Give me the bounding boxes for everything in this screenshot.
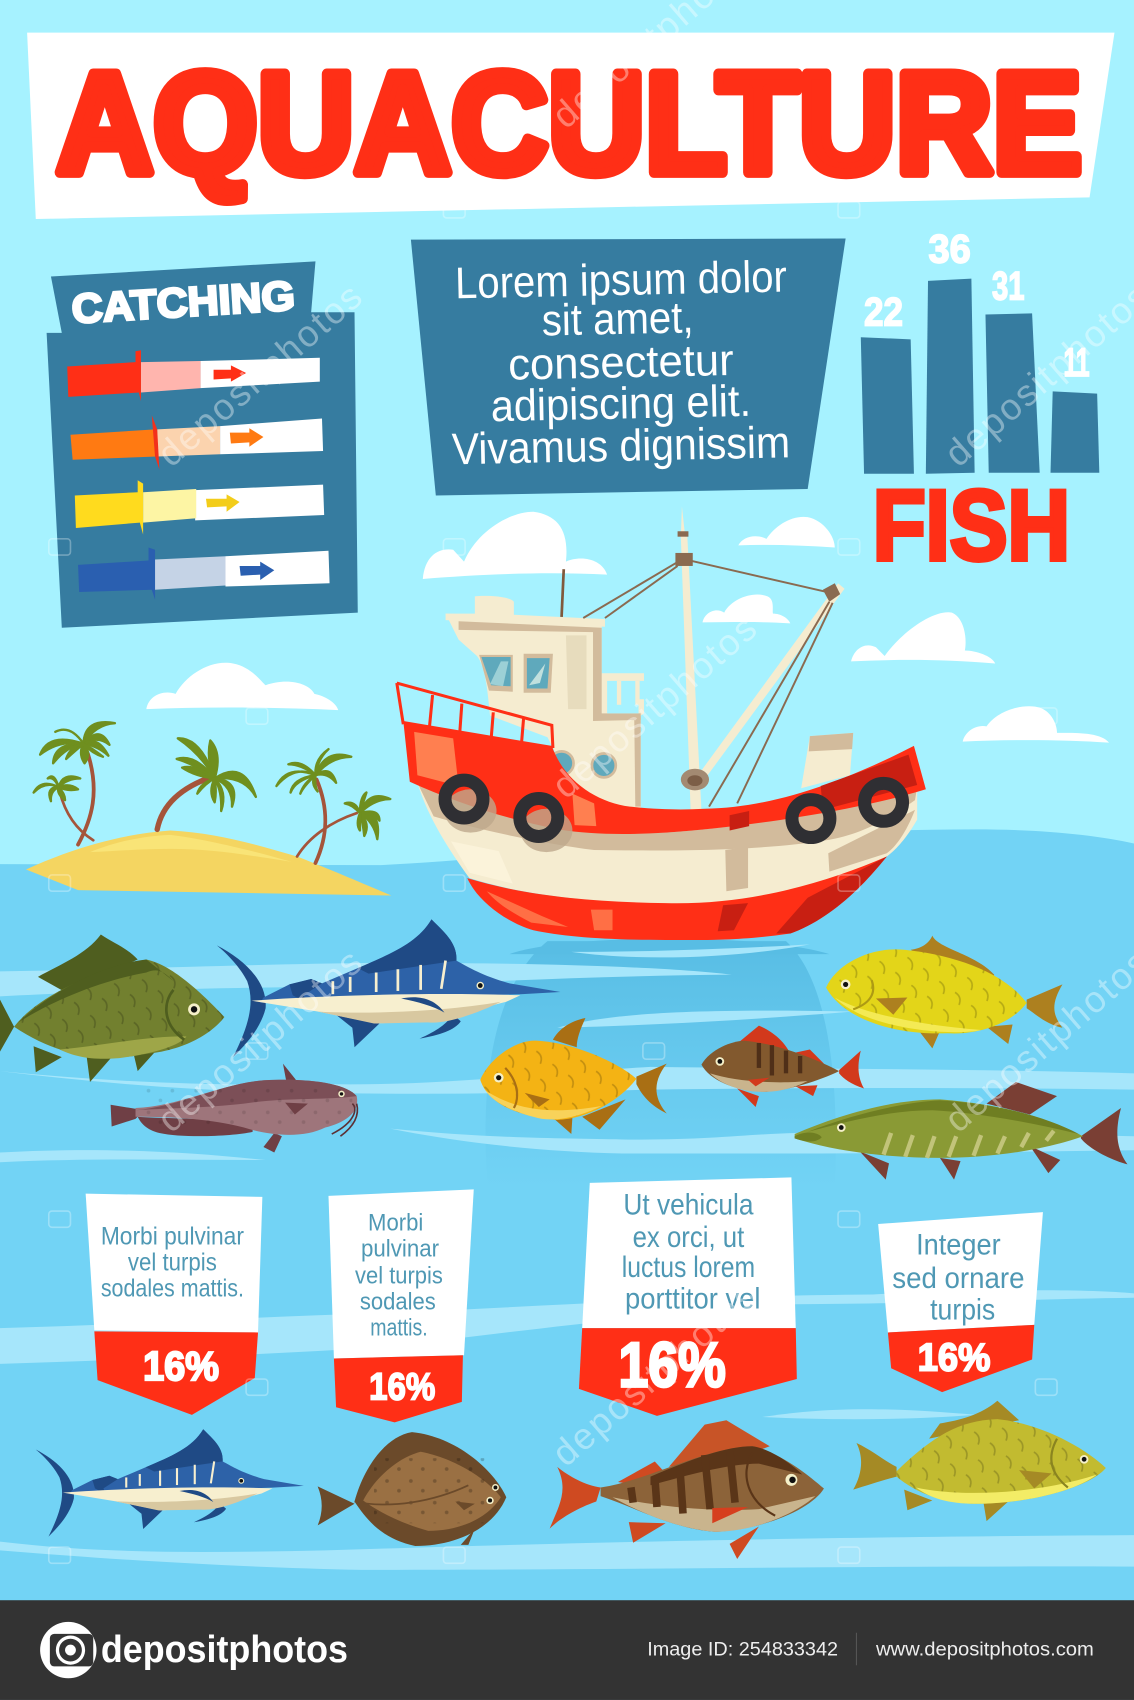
watermarks: depositphotos	[150, 276, 370, 474]
bar: orange	[70, 415, 323, 469]
red bulwark	[403, 721, 926, 834]
card text: sodales	[360, 1289, 436, 1316]
lower red hull	[467, 857, 887, 940]
percent value: 16%	[143, 1343, 219, 1389]
card text: Ut vehicula	[623, 1189, 754, 1221]
fish: olive carp	[853, 1401, 1106, 1521]
percent value: 16%	[918, 1336, 990, 1379]
palm trunks	[60, 754, 357, 863]
bar: blue	[78, 548, 330, 600]
windows	[479, 655, 513, 692]
bar chart: fish	[861, 227, 1099, 581]
chart values: 11	[1064, 341, 1090, 385]
card text	[892, 1229, 1025, 1326]
card text: pulvinar	[361, 1236, 439, 1263]
cabin	[446, 596, 644, 811]
small camera watermarks	[49, 36, 1057, 1563]
fish: blue marlin	[217, 919, 560, 1057]
island with palm trees	[26, 722, 391, 896]
cream hull	[417, 783, 917, 904]
antenna	[562, 569, 564, 617]
card text: Morbi pulvinar	[101, 1223, 244, 1251]
chart values	[864, 227, 1090, 385]
fish: large perch	[550, 1420, 824, 1559]
text block: consectetur	[508, 336, 734, 390]
card text	[101, 1223, 244, 1303]
fish: small perch	[701, 1026, 864, 1107]
card text: Morbi	[368, 1210, 423, 1237]
panel: lorem ipsum description	[411, 239, 846, 495]
fish: green carp	[0, 935, 224, 1082]
chart values: 22	[864, 290, 903, 334]
panel: catching	[47, 261, 358, 628]
tire shadows	[444, 789, 572, 852]
tires	[445, 780, 903, 838]
card text: sed ornare	[892, 1263, 1025, 1295]
title text: AQUACULTURE	[56, 43, 1082, 203]
clouds	[146, 512, 1109, 743]
mast and rigging	[583, 506, 845, 810]
watermarks	[150, 0, 1134, 1474]
text block: Lorem ipsum dolor	[455, 252, 787, 308]
card text	[622, 1189, 761, 1316]
card: percent three	[579, 1177, 797, 1416]
heading: fish: FISH	[873, 470, 1070, 581]
fish: catfish	[111, 1064, 357, 1152]
image id: Image ID: 254833342	[647, 1639, 838, 1661]
card: percent one	[86, 1194, 262, 1415]
fish: flounder	[318, 1432, 506, 1546]
card text: turpis	[930, 1294, 995, 1326]
icon: camera logo	[40, 1622, 96, 1678]
card text: Integer	[916, 1229, 1001, 1261]
fish: golden carp	[480, 1018, 667, 1134]
fish: pike	[795, 1082, 1127, 1180]
card text: vel turpis	[128, 1249, 217, 1277]
card: percent four	[878, 1212, 1043, 1392]
palm leaves	[34, 722, 390, 839]
website: www.depositphotos.com	[875, 1639, 1094, 1661]
text block: Vivamus dignissim	[451, 418, 791, 474]
percent value: 16%	[618, 1331, 726, 1401]
text block: adipiscing elit.	[490, 377, 751, 431]
watermarks: depositphotos	[150, 941, 370, 1140]
card: percent two	[328, 1189, 474, 1422]
portholes	[550, 751, 574, 775]
card text: vel turpis	[355, 1263, 443, 1290]
percent value: 16%	[369, 1367, 435, 1409]
fishing boat	[397, 506, 926, 940]
footer bar	[0, 1600, 1134, 1700]
card text	[355, 1210, 443, 1342]
heading: catching: CATCHING	[70, 273, 296, 332]
bar: red	[67, 350, 320, 401]
card text: ex orci, ut	[633, 1222, 744, 1254]
card text: mattis.	[370, 1315, 428, 1342]
text block: sit amet,	[541, 293, 694, 346]
sea	[0, 829, 1134, 1605]
card text: porttitor vel	[625, 1284, 761, 1316]
logo text: depositphotos	[101, 1629, 348, 1671]
watermarks: depositphotos	[544, 607, 764, 806]
title banner	[27, 33, 1114, 219]
railing	[397, 683, 553, 748]
fish: bottom marlin	[36, 1429, 304, 1537]
fish: yellow carp	[826, 936, 1062, 1048]
card text: luctus lorem	[622, 1252, 755, 1284]
chart values: 36	[929, 227, 971, 271]
chart values: 31	[992, 264, 1025, 308]
bar: yellow	[75, 480, 324, 535]
watermarks: depositphotos	[544, 1275, 764, 1474]
stern stack	[801, 733, 853, 788]
card text: sodales mattis.	[101, 1275, 244, 1303]
text block	[451, 252, 791, 474]
